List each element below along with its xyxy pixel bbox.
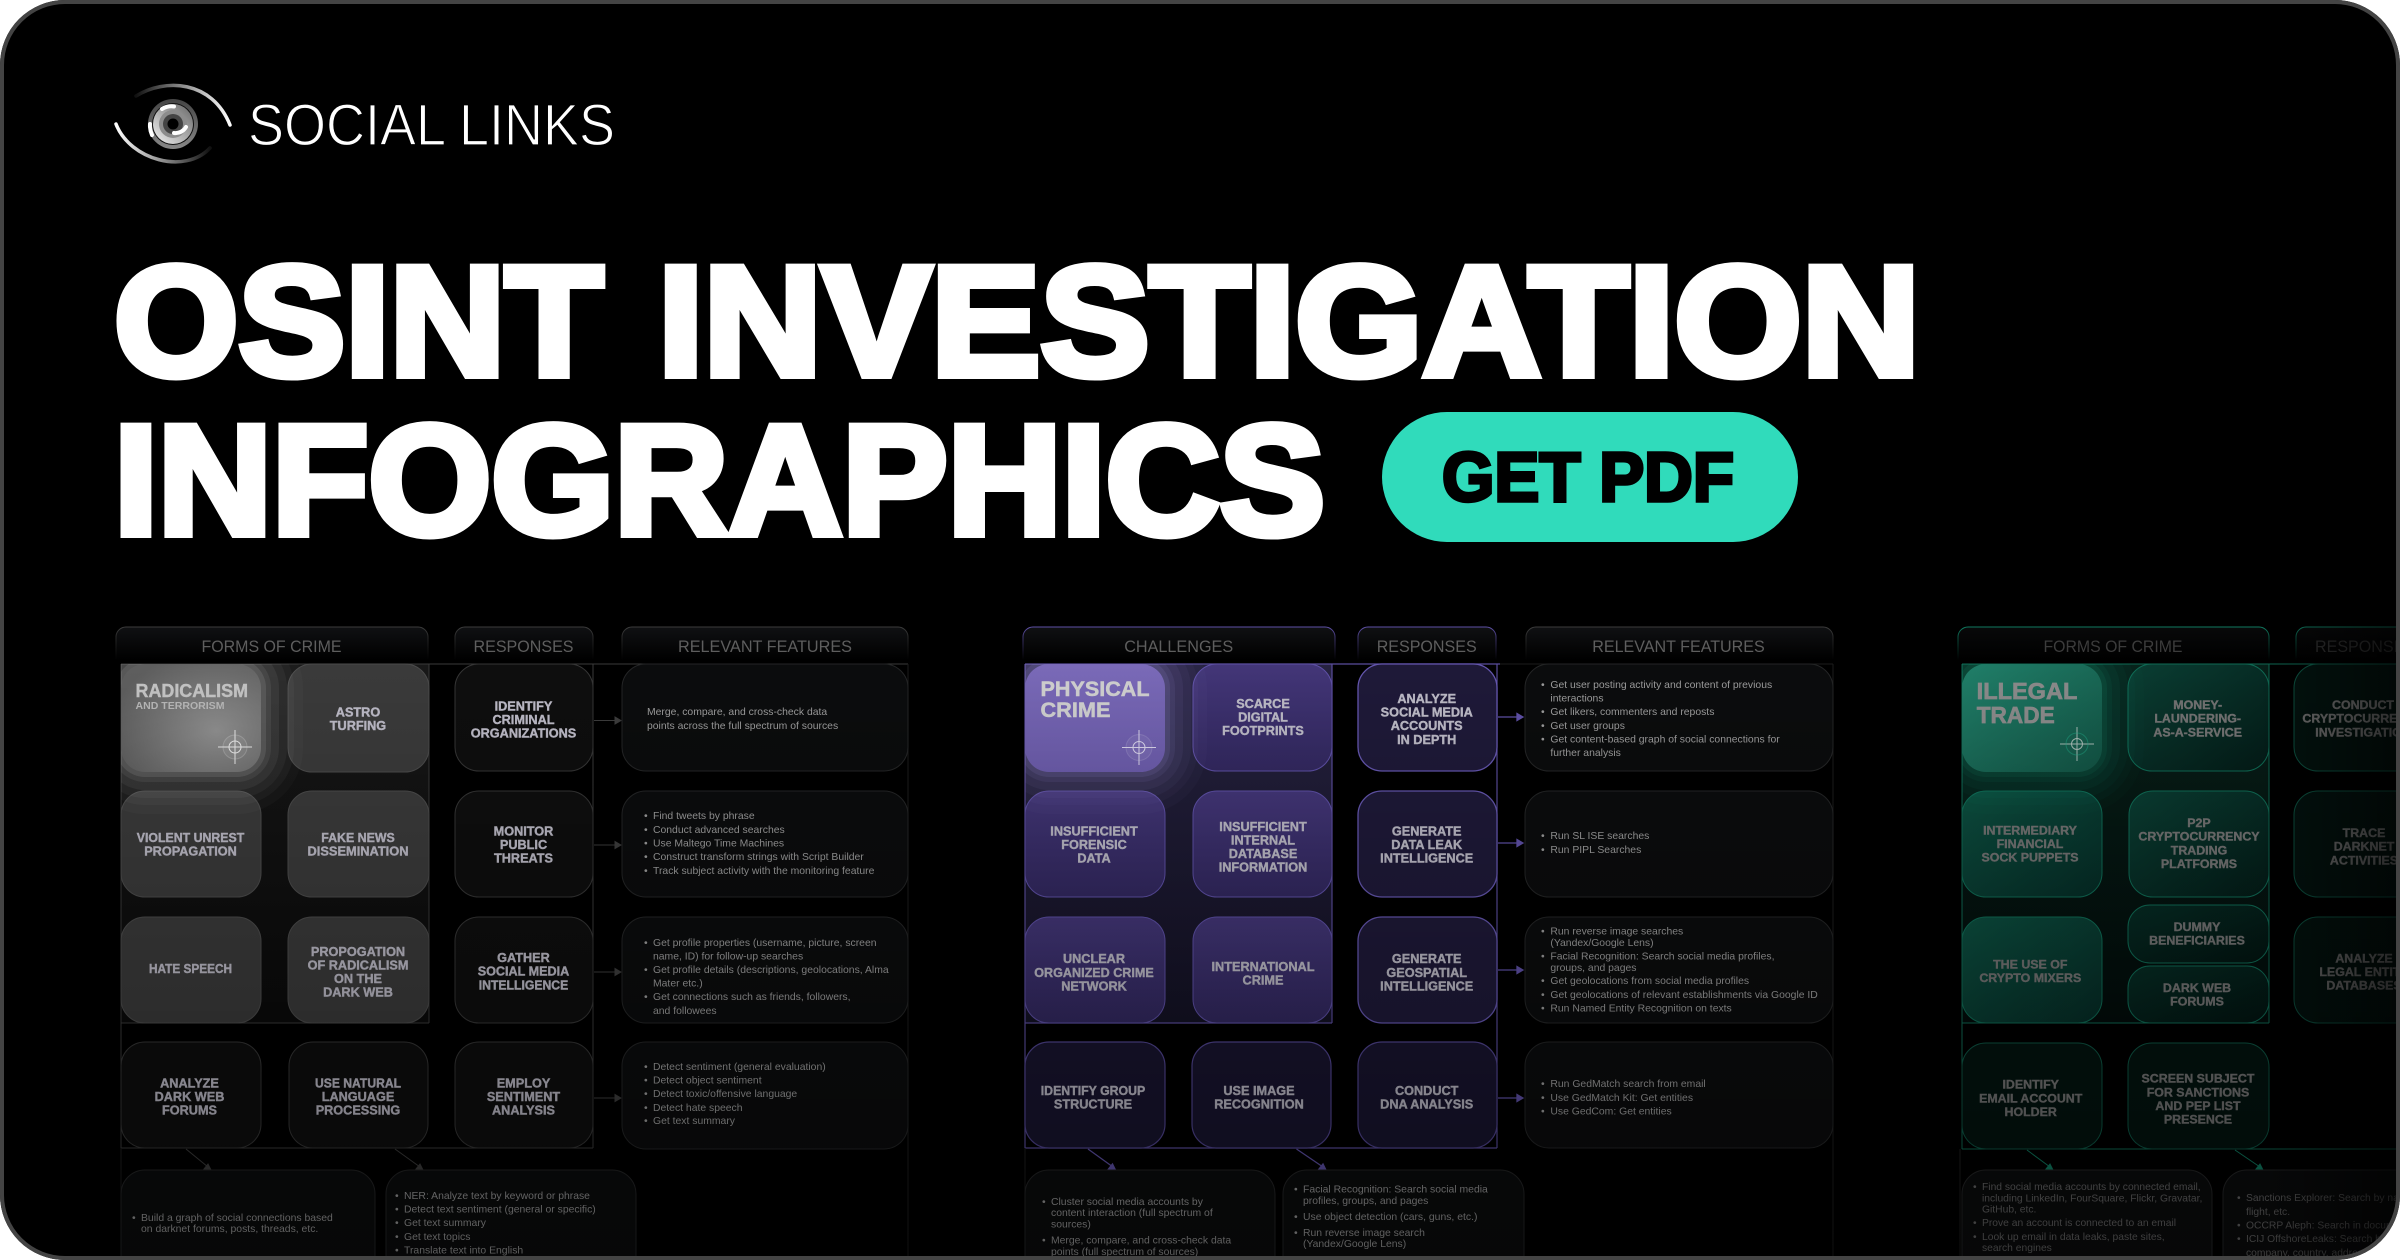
features: darknet graph: on darknet forums, posts, threads, etc.	[141, 1224, 318, 1235]
card: Dark Web Forums: DARK WEB	[2163, 981, 2231, 995]
card: Generate Geospatial Intelligence: GEOSPATIAL	[1386, 966, 1467, 980]
features: profile properties: •	[644, 965, 648, 976]
card: Identify Email Account Holder: IDENTIFY	[2002, 1078, 2060, 1092]
column headers: RELEVANT FEATURES	[1592, 638, 1765, 656]
card: Propogation of Radicalism	[288, 917, 429, 1023]
card: Money Laundering as a Service	[2128, 664, 2269, 771]
card: Insufficient Internal Database Information: INSUFFICIENT	[1219, 820, 1307, 834]
card: Scarce Digital Footprints: SCARCE	[1236, 697, 1290, 711]
card: Analyze Social Media Accounts: SOCIAL MEDIA	[1381, 706, 1473, 720]
logo: Social Links	[116, 85, 615, 162]
card: International Crime: INTERNATIONAL	[1212, 960, 1315, 974]
card: The Use of Crypto Mixers: THE USE OF	[1993, 957, 2068, 971]
card: Unclear Organized Crime Network: UNCLEAR	[1063, 952, 1125, 966]
column headers: CHALLENGES	[1124, 638, 1233, 656]
features: reverse image: (Yandex/Google Lens)	[1550, 938, 1654, 949]
card: Use Image Recognition: USE IMAGE	[1223, 1084, 1295, 1098]
features: social accounts by email: •	[1973, 1232, 1977, 1243]
card: Fake News Dissemination: FAKE NEWS	[321, 831, 395, 845]
features: reverse image: •	[1541, 990, 1545, 1001]
features: reverse image: •	[1541, 926, 1545, 938]
card: Trace Darknet Activities: ACTIVITIES	[2330, 853, 2398, 867]
card: Insufficient Internal Database Information: INFORMATION	[1219, 860, 1307, 874]
card: Intermediary Financial Sock Puppets: SOCK PUPPETS	[1981, 851, 2079, 865]
features: reverse image: •	[1541, 1004, 1545, 1014]
card: Violent Unrest Propagation: PROPAGATION	[144, 844, 237, 858]
features: sanctions: •	[2237, 1193, 2241, 1204]
card: Analyze Dark Web Forums: DARK WEB	[155, 1090, 224, 1104]
card: Generate Geospatial Intelligence	[1358, 917, 1497, 1023]
features: searches: Run PIPL Searches	[1550, 845, 1641, 856]
card: Identify Criminal Organizations: CRIMINAL	[492, 713, 555, 727]
card: Analyze Legal Entity Databases: ANALYZE	[2335, 951, 2393, 965]
button: Get PDF	[1382, 412, 1798, 542]
card: Gather Social Media Intelligence: SOCIAL MEDIA	[478, 965, 569, 979]
card: Illegal Trade	[1962, 664, 2102, 772]
features: searches: Run SL ISE searches	[1550, 831, 1649, 842]
card: Insufficient Internal Database Information	[1193, 791, 1332, 897]
features: reverse image: groups, and pages	[1550, 963, 1636, 974]
features: NER: •	[395, 1204, 399, 1216]
title	[114, 235, 1920, 568]
card: Dark Web Forums: FORUMS	[2170, 995, 2224, 1009]
features: NER: •	[395, 1191, 399, 1202]
card: Identify Email Account Holder	[1962, 1043, 2102, 1149]
features: social accounts by email	[1962, 1170, 2212, 1260]
features: sanctions: ICIJ OffshoreLeaks: Search by	[2246, 1234, 2387, 1245]
features: reverse image: •	[1541, 976, 1545, 987]
features: reverse image	[1525, 917, 1833, 1023]
card: P2P Cryptocurrency Trading Platforms: TRADING	[2171, 843, 2227, 857]
features: clustering: Cluster social media accounts by	[1051, 1197, 1204, 1208]
card: Insufficient Internal Database Information: INTERNAL	[1231, 834, 1295, 848]
card: Generate Geospatial Intelligence: INTELLIGENCE	[1380, 980, 1473, 994]
card: Screen Subject: PRESENCE	[2164, 1113, 2232, 1127]
card: Identify Group Structure: IDENTIFY GROUP	[1041, 1084, 1146, 1098]
card: The Use of Crypto Mixers	[1962, 917, 2102, 1023]
features: GedMatch: Use GedCom: Get entities	[1550, 1106, 1672, 1118]
features: facial recognition: Facial Recognition: Search social media	[1303, 1184, 1488, 1196]
card: Gather Social Media Intelligence	[455, 917, 593, 1023]
title: INFOGRAPHICS	[114, 394, 1325, 568]
features: searches: •	[1541, 845, 1545, 856]
features: clustering: Merge, compare, and cross-check data	[1051, 1236, 1231, 1246]
features: clustering	[1025, 1170, 1275, 1260]
features: clustering: •	[1042, 1236, 1046, 1246]
features: social accounts by email: Look up email in data leaks, paste sites,	[1982, 1232, 2165, 1243]
features: tweets: •	[644, 838, 648, 850]
features: facial recognition: •	[1294, 1212, 1298, 1223]
features: sentiment: •	[644, 1103, 648, 1114]
features: sentiment: •	[644, 1116, 648, 1127]
icon: crosshair	[218, 730, 252, 764]
features: NER: NER: Analyze text by keyword or phrase	[404, 1191, 590, 1202]
card: Intermediary Financial Sock Puppets	[1962, 791, 2102, 897]
features: user posting: •	[1541, 680, 1545, 691]
features: tweets: •	[644, 825, 648, 836]
features: NER: Get text summary	[404, 1218, 487, 1229]
card: Analyze Social Media Accounts: IN DEPTH	[1397, 733, 1456, 747]
features: NER: •	[395, 1218, 399, 1229]
card: Unclear Organized Crime Network: ORGANIZED CRIME	[1034, 966, 1154, 980]
features: sanctions: •	[2237, 1220, 2241, 1232]
column headers: RESPONSES	[1377, 638, 1477, 656]
features: facial recognition: •	[1294, 1184, 1298, 1196]
features: merge and cross-check	[622, 664, 908, 771]
features: facial recognition: Run reverse image search	[1303, 1228, 1425, 1239]
card: Analyze Dark Web Forums: ANALYZE	[160, 1076, 219, 1090]
card: Employ Sentiment Analysis: SENTIMENT	[487, 1090, 560, 1104]
card: Propogation of Radicalism: ON THE	[334, 972, 382, 986]
features: profile properties: and followees	[653, 1006, 717, 1017]
features: user posting: Get user groups	[1550, 721, 1625, 732]
features: profile properties	[622, 917, 908, 1023]
card: Money Laundering as a Service: MONEY-	[2173, 698, 2222, 712]
arrows: cards to features	[2027, 1150, 2263, 1170]
card: Generate Geospatial Intelligence: GENERATE	[1392, 952, 1461, 966]
features: user posting: Get likers, commenters and reposts	[1550, 707, 1714, 718]
card: Illegal Trade: TRADE	[1977, 702, 2055, 728]
features: profile properties: •	[644, 992, 648, 1003]
card: Scarce Digital Footprints	[1193, 664, 1332, 771]
card: Use Natural Language Processing: LANGUAGE	[322, 1090, 394, 1104]
features: profile properties: name, ID) for follow-up searches	[653, 952, 803, 962]
card: Screen Subject: AND PEP LIST	[2155, 1099, 2241, 1113]
card: Identify Criminal Organizations	[455, 664, 593, 771]
card: Conduct Cryptocurrency Investigation: CONDUCT	[2332, 698, 2394, 712]
features: GedMatch	[1525, 1042, 1833, 1148]
features: social accounts by email: including LinkedIn, FourSquare, Flickr, Gravatar,	[1982, 1194, 2202, 1204]
card: Gather Social Media Intelligence: GATHER	[497, 951, 550, 965]
features: clustering: points (full spectrum of sources)	[1051, 1247, 1198, 1258]
card: Identify Email Account Holder: HOLDER	[2005, 1105, 2057, 1119]
card: Dummy Beneficiaries	[2128, 905, 2269, 963]
card: Propogation of Radicalism: PROPOGATION	[311, 945, 405, 959]
card: Analyze Dark Web Forums	[121, 1042, 261, 1148]
card: Intermediary Financial Sock Puppets: FINANCIAL	[1997, 837, 2064, 851]
card: Screen Subject	[2128, 1043, 2269, 1149]
features: profile properties: Get profile details (descriptions, geolocations, Alma	[653, 965, 889, 976]
features: user posting: Get user posting activity and content of previous	[1550, 680, 1772, 691]
features: tweets: Conduct advanced searches	[653, 825, 785, 836]
features: searches	[1525, 791, 1833, 897]
features: sanctions: •	[2237, 1234, 2241, 1245]
features: tweets: •	[644, 866, 648, 877]
features: social accounts by email: Find social media accounts by connected email,	[1982, 1182, 2201, 1193]
card: The Use of Crypto Mixers: CRYPTO MIXERS	[1979, 971, 2081, 985]
card: Unclear Organized Crime Network	[1025, 917, 1165, 1023]
card: Insufficient Internal Database Information: DATABASE	[1229, 847, 1297, 861]
features: searches: •	[1541, 831, 1545, 842]
card: Use Natural Language Processing	[289, 1042, 428, 1148]
card: P2P Cryptocurrency Trading Platforms: PLATFORMS	[2161, 857, 2237, 871]
card: Employ Sentiment Analysis	[455, 1042, 593, 1148]
card: Monitor Public Threats: PUBLIC	[500, 838, 547, 852]
column headers	[1023, 627, 1833, 660]
column headers: RELEVANT FEATURES	[678, 638, 852, 656]
card: Screen Subject: SCREEN SUBJECT	[2142, 1072, 2255, 1086]
features: user posting: further analysis	[1550, 748, 1621, 759]
card: Illegal Trade: ILLEGAL	[1977, 678, 2077, 704]
features: tweets	[622, 791, 908, 897]
features: user posting: •	[1541, 721, 1545, 732]
icon: crosshair	[2060, 727, 2094, 761]
features: reverse image: Get geolocations of relevant establishments via Google ID	[1550, 990, 1818, 1001]
card: Use Image Recognition: RECOGNITION	[1214, 1098, 1304, 1112]
features: social accounts by email: GitHub, etc.	[1982, 1204, 2036, 1216]
features: facial recognition: •	[1294, 1228, 1298, 1239]
card: Generate Data Leak Intelligence: DATA LEAK	[1391, 838, 1463, 852]
panel: physical crime	[983, 622, 1833, 1260]
card: Analyze Legal Entity Databases	[2294, 917, 2400, 1023]
features: clustering: content interaction (full spectrum of	[1051, 1208, 1213, 1219]
features: profile properties: Mater etc.)	[653, 978, 703, 990]
card: P2P Cryptocurrency Trading Platforms	[2129, 791, 2269, 897]
card: Analyze Social Media Accounts	[1358, 664, 1497, 771]
card: Astro Turfing: ASTRO	[336, 706, 380, 720]
features: NER: •	[395, 1246, 399, 1256]
card: Scarce Digital Footprints: FOOTPRINTS	[1222, 724, 1304, 738]
card: Trace Darknet Activities: DARKNET	[2334, 840, 2395, 854]
features: user posting	[1525, 664, 1833, 771]
features: social accounts by email: •	[1973, 1218, 1977, 1229]
features: profile properties: Get connections such as friends, followers,	[653, 992, 851, 1003]
card: P2P Cryptocurrency Trading Platforms: P2P	[2187, 816, 2211, 830]
features: tweets: Use Maltego Time Machines	[653, 838, 784, 850]
features: facial recognition: profiles, groups, and pages	[1303, 1196, 1428, 1207]
column headers: RESPONSES	[474, 638, 574, 656]
card: Use Image Recognition	[1192, 1042, 1331, 1148]
card: Identify Criminal Organizations: IDENTIFY	[495, 700, 553, 714]
features: NER	[386, 1170, 636, 1260]
card: Monitor Public Threats	[455, 791, 593, 897]
column headers	[116, 627, 908, 660]
card: Propogation of Radicalism: DARK WEB	[323, 986, 393, 1000]
panel: illegal trade	[1920, 622, 2400, 1260]
card: Insufficient Forensic Data: INSUFFICIENT	[1050, 824, 1138, 838]
features: sentiment: •	[644, 1089, 648, 1100]
features: facial recognition: (Yandex/Google Lens)	[1303, 1239, 1406, 1250]
features: profile properties: Get profile properties (username, picture, screen	[653, 938, 877, 949]
card: Gather Social Media Intelligence: INTELLIGENCE	[479, 978, 568, 992]
card: Intermediary Financial Sock Puppets: INTERMEDIARY	[1983, 823, 2078, 837]
features: tweets: Find tweets by phrase	[653, 811, 755, 822]
card: Radicalism: RADICALISM	[136, 681, 248, 701]
card: Generate Data Leak Intelligence: GENERATE	[1392, 824, 1461, 838]
features: darknet graph: Build a graph of social connections based	[141, 1213, 333, 1224]
features: user posting: •	[1541, 707, 1545, 718]
icon: crosshair	[1122, 730, 1156, 765]
features: clustering: •	[1042, 1197, 1046, 1208]
card: Hate Speech	[121, 917, 261, 1023]
card: Dark Web Forums	[2128, 966, 2269, 1023]
card: Conduct DNA Analysis: CONDUCT	[1395, 1084, 1459, 1098]
arrows: responses to features	[186, 717, 621, 1170]
wordmark: SOCIAL LINKS	[248, 93, 615, 158]
card: Insufficient Forensic Data	[1025, 791, 1165, 897]
card: Use Natural Language Processing: PROCESSING	[316, 1104, 400, 1118]
features: tweets: Track subject activity with the monitoring feature	[653, 866, 875, 877]
features: GedMatch: •	[1541, 1106, 1545, 1118]
card: Physical Crime: PHYSICAL	[1040, 678, 1150, 701]
features: darknet graph	[121, 1170, 375, 1260]
card: Conduct Cryptocurrency Investigation	[2294, 664, 2400, 771]
features: GedMatch: Run GedMatch search from email	[1550, 1079, 1706, 1090]
card: Radicalism: AND TERRORISM	[136, 700, 225, 712]
features: sentiment: Get text summary	[653, 1116, 736, 1127]
card: Trace Darknet Activities: TRACE	[2343, 826, 2385, 840]
features: profile properties: •	[644, 938, 648, 949]
card: Employ Sentiment Analysis: EMPLOY	[497, 1076, 551, 1090]
card: International Crime	[1193, 917, 1332, 1023]
title: OSINT	[114, 235, 603, 409]
card: Propogation of Radicalism: OF RADICALISM	[308, 958, 408, 972]
features: NER: Translate text into English	[404, 1246, 523, 1256]
features: sentiment	[622, 1042, 908, 1149]
card: Identify Email Account Holder: EMAIL ACCOUNT	[1979, 1091, 2083, 1105]
card: Dummy Beneficiaries: DUMMY	[2174, 920, 2221, 934]
features: tweets: •	[644, 852, 648, 863]
features: GedMatch: •	[1541, 1079, 1545, 1090]
card: Employ Sentiment Analysis: ANALYSIS	[492, 1104, 555, 1118]
features: NER: Detect text sentiment (general or specific)	[404, 1204, 596, 1216]
card: Identify Group Structure	[1025, 1042, 1165, 1148]
features: sentiment: Detect sentiment (general evaluation)	[653, 1062, 826, 1073]
icon: eye	[116, 85, 230, 162]
features: facial recognition: Use object detection (cars, guns, etc.)	[1303, 1212, 1477, 1223]
card: Analyze Social Media Accounts: ACCOUNTS	[1391, 719, 1463, 733]
card: Fake News Dissemination: DISSEMINATION	[308, 844, 408, 858]
card: Physical Crime	[1025, 664, 1165, 772]
card: Monitor Public Threats: THREATS	[494, 852, 553, 866]
features: tweets: Construct transform strings with Script Builder	[653, 852, 864, 863]
features: GedMatch: Use GedMatch Kit: Get entities	[1550, 1093, 1693, 1104]
card: Physical Crime: CRIME	[1040, 699, 1110, 722]
features: social accounts by email: •	[1973, 1182, 1977, 1193]
features: sanctions: flight, etc.	[2246, 1207, 2290, 1218]
features: merge and cross-check: Merge, compare, and cross-check data	[647, 707, 827, 718]
features: social accounts by email: search engines	[1982, 1243, 2052, 1254]
card: Radicalism	[121, 664, 261, 772]
card: Identify Criminal Organizations: ORGANIZATIONS	[471, 727, 576, 741]
card: Use Natural Language Processing: USE NATURAL	[315, 1076, 401, 1090]
card: Screen Subject: FOR SANCTIONS	[2147, 1085, 2249, 1099]
features: sentiment: Detect object sentiment	[653, 1076, 762, 1086]
card: Dummy Beneficiaries: BENEFICIARIES	[2149, 934, 2245, 948]
card: Conduct DNA Analysis	[1358, 1042, 1497, 1148]
features: merge and cross-check: points across the full spectrum of sources	[647, 721, 838, 732]
features: reverse image: Run Named Entity Recognition on texts	[1550, 1004, 1732, 1014]
card: Analyze Dark Web Forums: FORUMS	[162, 1104, 217, 1118]
features: reverse image: Facial Recognition: Search social media profiles,	[1550, 952, 1774, 962]
card: Monitor Public Threats: MONITOR	[494, 824, 553, 838]
card: Conduct DNA Analysis: DNA ANALYSIS	[1380, 1098, 1473, 1112]
arrows: responses to features	[1088, 714, 1523, 1170]
features: sentiment: •	[644, 1062, 648, 1073]
features: user posting: •	[1541, 734, 1545, 746]
features: user posting: interactions	[1550, 694, 1604, 704]
card: Analyze Social Media Accounts: ANALYZE	[1397, 692, 1456, 706]
card: Insufficient Forensic Data: FORENSIC	[1061, 838, 1127, 852]
features: sentiment: Detect toxic/offensive language	[653, 1089, 797, 1100]
features: sentiment: Detect hate speech	[653, 1103, 743, 1114]
title: INVESTIGATION	[658, 235, 1920, 409]
card: Violent Unrest Propagation	[121, 791, 261, 897]
features: tweets: •	[644, 811, 648, 822]
card: Identify Group Structure: STRUCTURE	[1054, 1098, 1132, 1112]
features: NER: Get text topics	[404, 1232, 470, 1243]
features: clustering: sources)	[1051, 1220, 1091, 1230]
card: Astro Turfing	[288, 664, 429, 772]
card: Violent Unrest Propagation: VIOLENT UNREST	[137, 831, 244, 845]
card: Generate Data Leak Intelligence: INTELLIGENCE	[1380, 852, 1473, 866]
features: sanctions	[2223, 1170, 2400, 1260]
features: sentiment: •	[644, 1076, 648, 1086]
card: Unclear Organized Crime Network: NETWORK	[1061, 980, 1128, 994]
features: sanctions: company, country, address	[2246, 1248, 2368, 1259]
card: Scarce Digital Footprints: DIGITAL	[1238, 710, 1288, 724]
column headers	[1958, 627, 2400, 660]
column headers: FORMS OF CRIME	[202, 638, 342, 656]
features: darknet graph: •	[132, 1213, 136, 1224]
card: P2P Cryptocurrency Trading Platforms: CRYPTOCURRENCY	[2138, 830, 2260, 844]
card: Trace Darknet Activities	[2294, 791, 2400, 897]
features: reverse image: Get geolocations from social media profiles	[1550, 976, 1749, 987]
button: Get PDF: GET PDF	[1442, 438, 1734, 516]
card: Money Laundering as a Service: LAUNDERING-	[2154, 712, 2241, 726]
card: Analyze Legal Entity Databases: DATABASES	[2326, 979, 2400, 993]
features: reverse image: Run reverse image searches	[1550, 926, 1683, 938]
features: NER: •	[395, 1232, 399, 1243]
column headers: FORMS OF CRIME	[2044, 638, 2182, 656]
card: Hate Speech: HATE SPEECH	[149, 962, 232, 976]
card: Astro Turfing: TURFING	[330, 719, 386, 733]
card: Generate Data Leak Intelligence	[1358, 791, 1497, 897]
card: Money Laundering as a Service: AS-A-SERVICE	[2153, 725, 2242, 739]
features: reverse image: •	[1541, 952, 1545, 962]
features: GedMatch: •	[1541, 1093, 1545, 1104]
features: user posting: Get content-based graph of social connections for	[1550, 734, 1780, 746]
card: Fake News Dissemination	[288, 791, 429, 897]
card: International Crime: CRIME	[1243, 974, 1283, 988]
card: Insufficient Forensic Data: DATA	[1077, 852, 1111, 866]
features: social accounts by email: Prove an account is connected to an email	[1982, 1218, 2176, 1229]
panel: radicalism and terrorism	[79, 622, 908, 1260]
features: facial recognition	[1283, 1170, 1524, 1260]
